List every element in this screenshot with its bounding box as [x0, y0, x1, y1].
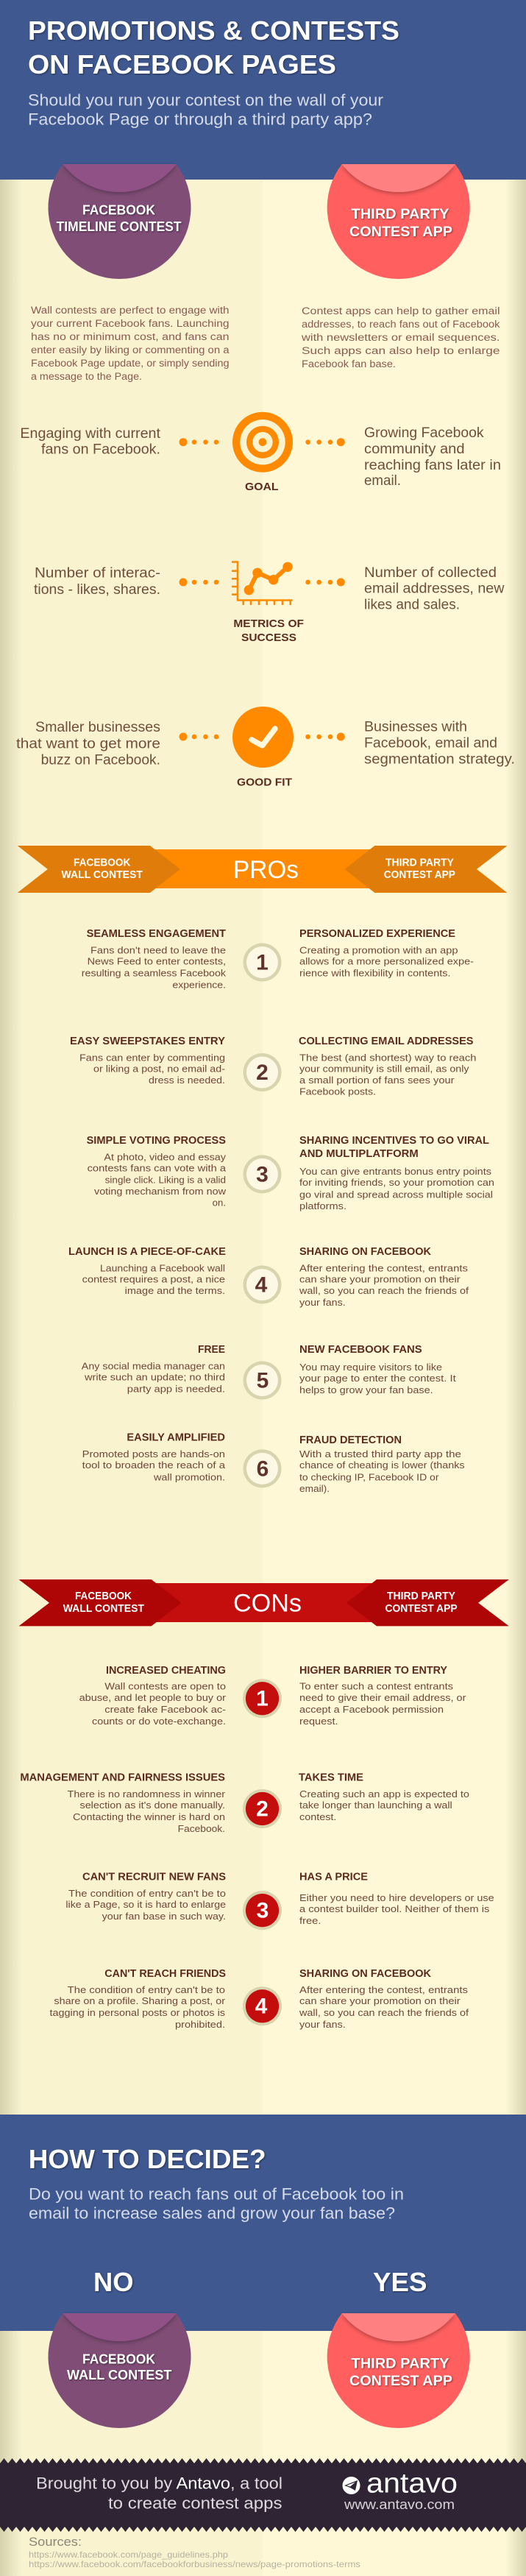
banner: pros: CONTEST APP — [384, 868, 455, 881]
credit text: Brought to you by Antavo, a tool — [36, 2474, 282, 2492]
pro 6 right: fraud detection: FRAUD DETECTION — [299, 1434, 402, 1446]
pro 3 left: simple voting process: voting mechanism from now — [94, 1186, 227, 1197]
label: good fit: GOOD FIT — [237, 776, 292, 789]
pro 4 left: launch is a piece of cake — [68, 1246, 226, 1296]
pro 1 right: personalized experience: allows for a more personalized expe- — [299, 956, 474, 967]
pro 4 left: launch is a piece of cake: image and the terms. — [125, 1285, 225, 1296]
pro 1 left: seamless engagement: experience. — [172, 979, 226, 990]
text block: contest app intro: addresses, to reach fans out of Facebook — [302, 319, 500, 330]
number badge 5: 5 — [257, 1369, 269, 1393]
con 3 left: can't recruit new fans: like a Page, so it is hard to enlarge — [65, 1899, 226, 1910]
row: good fit, right text: Businesses with — [364, 720, 467, 735]
con 4 right: sharing on facebook — [299, 1968, 469, 2030]
badge: Facebook timeline contest: FACEBOOK — [82, 203, 155, 218]
subtitle: Should you run your contest on the wall of your — [28, 91, 383, 109]
pro 3 left: simple voting process: SIMPLE VOTING PROCESS — [87, 1135, 226, 1147]
number badge 3: 3 — [256, 1162, 269, 1186]
row: good fit, left text: buzz on Facebook. — [41, 752, 160, 768]
row: goal, right text — [364, 425, 501, 489]
con 2 right: takes time — [299, 1772, 469, 1822]
title — [28, 15, 399, 79]
con 3 left: can't recruit new fans: CAN'T RECRUIT NEW FANS — [82, 1872, 226, 1883]
pro 3 left: simple voting process — [87, 1135, 227, 1208]
con 1 right: higher barrier to entry: To enter such a contest entrants — [299, 1681, 454, 1692]
number badge 3: 3 — [257, 1899, 269, 1923]
con 4 right: sharing on facebook: can share your promotion on their — [299, 1995, 461, 2006]
number badge 2: 2 — [256, 1061, 269, 1085]
row: goal, right text: email. — [364, 473, 401, 489]
pro 1 left: seamless engagement: News Feed to enter contests, — [88, 956, 226, 967]
pro 3 right: sharing incentives: platforms. — [299, 1200, 346, 1211]
text block: wall contest intro: your current Facebook fans. Launching — [31, 318, 230, 329]
row: good fit, right text — [364, 720, 515, 768]
banner: pros: PROs — [233, 856, 299, 884]
pro 2 right: collecting email addresses: your community is still email, as only — [299, 1063, 469, 1074]
con 2 right: takes time: take longer than launching a wall — [299, 1800, 452, 1811]
pro 1 right: personalized experience — [299, 928, 474, 979]
text block: contest app intro: Facebook fan base. — [302, 358, 396, 369]
text block: wall contest intro: enter easily by liking or commenting on a — [31, 344, 230, 355]
number badge 2 — [243, 1053, 281, 1091]
con 2 left: management and fairness issues: Contacting the winner is hard on — [73, 1811, 225, 1822]
label: no: NO — [93, 2267, 134, 2297]
con 2 right: takes time: contest. — [299, 1811, 336, 1822]
row: good fit, left text: Smaller businesses — [35, 720, 160, 735]
pro 5 right: new facebook fans: You may require visitors to like — [299, 1362, 442, 1373]
badge: Facebook timeline contest: TIMELINE CONTEST — [57, 219, 182, 234]
heading: how to decide: HOW TO DECIDE? — [29, 2144, 266, 2174]
pro 5 left: free: party app is needed. — [127, 1383, 225, 1394]
pro 3 right: sharing incentives — [299, 1135, 494, 1211]
pro 2 right: collecting email addresses: COLLECTING EMAIL ADDRESSES — [299, 1036, 474, 1047]
number badge 1 — [243, 1679, 282, 1718]
con 3 right: has a price: a contest builder tool. Neither of them is — [299, 1903, 490, 1914]
credit text: to create contest apps — [108, 2494, 282, 2513]
number badge 4: 4 — [255, 1995, 268, 2019]
con 4 left: can't reach friends: share on a profile. Sharing a post, or — [54, 1995, 226, 2006]
con 3 right: has a price: Either you need to hire developers or use — [299, 1892, 494, 1903]
dotted connector left — [180, 733, 218, 740]
pro 1 right: personalized experience: Creating a promotion with an app — [299, 944, 458, 955]
con 1 right: higher barrier to entry: accept a Facebook permission — [299, 1704, 444, 1715]
panel: header — [0, 0, 526, 180]
pro 6 right: fraud detection: to checking IP, Facebook ID or — [299, 1471, 439, 1482]
pro 5 left: free: write such an update; no third — [84, 1371, 225, 1382]
text block: wall contest intro: Wall contests are perfect to engage with — [31, 305, 230, 316]
icon: line chart — [232, 562, 293, 605]
pro 1 right: personalized experience: PERSONALIZED EXPERIENCE — [299, 928, 455, 940]
pro 3 left: simple voting process: At photo, video and essay — [104, 1151, 227, 1162]
pro 5 left: free: FREE — [198, 1344, 225, 1356]
row: good fit, left text — [16, 720, 160, 768]
number badge 2 — [243, 1789, 282, 1828]
question text: email to increase sales and grow your fan base? — [29, 2204, 395, 2222]
row: metrics, left text — [34, 566, 160, 598]
badge: third party contest app: THIRD PARTY — [352, 2355, 449, 2371]
dotted connector left — [180, 578, 218, 586]
con 2 left: management and fairness issues — [20, 1772, 226, 1834]
banner: cons: WALL CONTEST — [63, 1602, 144, 1615]
pro 3 right: sharing incentives: go viral and spread across multiple social — [299, 1189, 493, 1200]
row: goal, right text: community and — [364, 442, 465, 457]
pro 2 right: collecting email addresses: a small portion of fans sees your — [299, 1075, 455, 1086]
sources: https://www.facebook.com/page_guidelines.php — [29, 2550, 228, 2560]
dotted connector right — [305, 733, 345, 740]
credit text — [36, 2474, 282, 2513]
text block: contest app intro — [301, 305, 500, 369]
con 4 left: can't reach friends: The condition of entry can't be to — [68, 1984, 225, 1995]
banner: pros — [18, 846, 507, 893]
pro 6 left: easily amplified: tool to broaden the reach of a — [82, 1459, 226, 1471]
sources — [29, 2535, 360, 2569]
pro 1 left: seamless engagement: SEAMLESS ENGAGEMENT — [87, 928, 226, 940]
label: yes: YES — [373, 2267, 427, 2297]
con 1 left: increased cheating: counts or do vote-exchange. — [92, 1716, 226, 1727]
icon: check mark — [232, 707, 294, 768]
pro 3 left: simple voting process: contests fans can vote with a — [88, 1162, 227, 1173]
pro 4 left: launch is a piece of cake: contest requires a post, a nice — [82, 1273, 225, 1285]
badge: Facebook wall contest: FACEBOOK — [82, 2352, 155, 2366]
row: goal, right text: Growing Facebook — [364, 425, 484, 441]
number badge 1 — [243, 944, 281, 982]
con 4 left: can't reach friends — [50, 1968, 226, 2030]
con 1 left: increased cheating: INCREASED CHEATING — [106, 1665, 226, 1677]
row: good fit, right text: Facebook, email and — [364, 736, 497, 751]
pro 3 left: simple voting process: on. — [213, 1197, 226, 1208]
pro 4 right: sharing on facebook: can share your promotion on their — [299, 1273, 461, 1285]
banner: pros: WALL CONTEST — [62, 868, 143, 881]
number badge 1: 1 — [256, 1687, 269, 1711]
banner: cons: CONTEST APP — [385, 1602, 458, 1615]
con 2 left: management and fairness issues: selection as it's done manually. — [79, 1800, 225, 1811]
con 3 right: has a price — [299, 1872, 494, 1926]
row: metrics, right text — [364, 565, 505, 612]
con 4 left: can't reach friends: prohibited. — [175, 2019, 225, 2030]
badge: Facebook timeline contest — [49, 164, 191, 279]
icon: target — [232, 412, 293, 473]
badge: third party contest app: CONTEST APP — [349, 224, 452, 240]
pro 4 right: sharing on facebook: your fans. — [299, 1297, 346, 1308]
question text — [29, 2184, 404, 2222]
banner: pros: THIRD PARTY — [385, 856, 454, 868]
number badge 5 — [243, 1362, 281, 1400]
pro 3 right: sharing incentives: SHARING INCENTIVES TO GO VIRAL — [299, 1135, 489, 1147]
pro 6 right: fraud detection — [299, 1434, 465, 1494]
pro 5 right: new facebook fans — [299, 1344, 456, 1395]
row: goal, left text: Engaging with current — [20, 426, 161, 442]
number badge 6 — [243, 1449, 281, 1487]
pro 1 right: personalized experience: rience with flexibility in contents. — [299, 968, 450, 979]
badge: third party contest app: CONTEST APP — [349, 2373, 452, 2389]
con 2 left: management and fairness issues: MANAGEMENT AND FAIRNESS ISSUES — [20, 1772, 225, 1784]
con 1 right: higher barrier to entry: HIGHER BARRIER TO ENTRY — [299, 1665, 447, 1677]
con 2 left: management and fairness issues: Facebook. — [178, 1823, 225, 1834]
pro 2 left: easy sweepstakes entry — [70, 1036, 225, 1086]
pro 3 right: sharing incentives: You can give entrants bonus entry points — [299, 1166, 492, 1177]
con 1 right: higher barrier to entry — [299, 1665, 466, 1727]
label: metrics of success — [233, 618, 304, 644]
con 3 left: can't recruit new fans: your fan base in such way. — [102, 1911, 226, 1922]
text block: contest app intro: Such apps can also help to enlarge — [302, 345, 500, 356]
label: metrics of success: METRICS OF — [233, 618, 304, 630]
row: goal, left text — [20, 426, 161, 458]
pro 5 right: new facebook fans: helps to grow your fan base. — [299, 1384, 433, 1395]
pro 6 right: fraud detection: With a trusted third party app the — [299, 1448, 461, 1459]
con 2 right: takes time: Creating such an app is expected to — [299, 1788, 469, 1800]
banner: cons — [19, 1579, 509, 1626]
text block: contest app intro: with newsletters or email sequences. — [301, 332, 500, 343]
con 3 right: has a price: free. — [299, 1915, 321, 1926]
text block: wall contest intro: has no or minimum cost, and fans can — [31, 331, 230, 342]
number badge 4 — [243, 1986, 282, 2025]
pro 6 left: easily amplified: wall promotion. — [153, 1471, 225, 1482]
logo: antavo: antavo — [366, 2469, 458, 2499]
pro 4 right: sharing on facebook: SHARING ON FACEBOOK — [299, 1246, 432, 1258]
text block: wall contest intro — [31, 305, 230, 382]
badge: third party contest app — [327, 164, 470, 279]
con 4 left: can't reach friends: tagging in personal posts or photos is — [50, 2007, 226, 2018]
question text: Do you want to reach fans out of Facebook too in — [29, 2184, 404, 2203]
number badge 1: 1 — [256, 951, 269, 974]
con 3 right: has a price: HAS A PRICE — [299, 1872, 368, 1883]
pro 2 right: collecting email addresses: The best (and shortest) way to reach — [299, 1052, 477, 1063]
pro 5 right: new facebook fans: NEW FACEBOOK FANS — [299, 1344, 422, 1356]
badge: Facebook wall contest: WALL CONTEST — [67, 2368, 172, 2382]
dotted connector right — [305, 438, 345, 446]
banner: cons: THIRD PARTY — [387, 1590, 455, 1602]
pro 6 right: fraud detection: chance of cheating is lower (thanks — [299, 1459, 465, 1471]
dotted connector left — [180, 438, 218, 446]
subtitle — [28, 91, 383, 128]
con 4 right: sharing on facebook: SHARING ON FACEBOOK — [299, 1968, 432, 1980]
row: metrics, right text: email addresses, new — [364, 581, 505, 597]
row: good fit, left text: that want to get more — [16, 737, 160, 752]
pro 2 left: easy sweepstakes entry: Fans can enter by commenting — [79, 1052, 225, 1063]
panel: how to decide — [0, 2115, 526, 2331]
con 1 left: increased cheating: Wall contests are open to — [104, 1681, 226, 1692]
con 1 left: increased cheating — [79, 1665, 227, 1727]
row: metrics, left text: Number of interac- — [35, 566, 160, 581]
con 2 left: management and fairness issues: There is no randomness in winner — [68, 1788, 226, 1800]
number badge 4: 4 — [255, 1273, 268, 1297]
con 3 left: can't recruit new fans: The condition of entry can't be to — [68, 1888, 226, 1899]
con 4 right: sharing on facebook: After entering the contest, entrants — [299, 1984, 469, 1995]
number badge 2: 2 — [256, 1797, 269, 1821]
pro 2 right: collecting email addresses — [299, 1036, 477, 1097]
con 1 left: increased cheating: abuse, and let people to buy or — [79, 1692, 227, 1703]
row: goal, left text: fans on Facebook. — [41, 442, 160, 458]
pro 3 right: sharing incentives: for inviting friends, so your promotion can — [299, 1177, 494, 1188]
pro 1 left: seamless engagement: resulting a seamless Facebook — [82, 968, 227, 979]
badge: third party contest app — [327, 2313, 470, 2428]
label: goal: GOAL — [245, 481, 278, 493]
badge: third party contest app: THIRD PARTY — [352, 206, 449, 222]
pro 5 left: free — [82, 1344, 225, 1394]
con 4 right: sharing on facebook: your fans. — [299, 2019, 346, 2030]
badge: Facebook wall contest — [48, 2313, 191, 2428]
pro 6 left: easily amplified: Promoted posts are hands-on — [82, 1448, 225, 1459]
pro 4 left: launch is a piece of cake: LAUNCH IS A PIECE-OF-CAKE — [68, 1246, 226, 1258]
pro 4 right: sharing on facebook: wall, so you can reach the friends of — [299, 1285, 469, 1296]
text block: wall contest intro: a message to the Page. — [31, 371, 142, 382]
pro 6 left: easily amplified: EASILY AMPLIFIED — [127, 1432, 225, 1444]
pro 2 left: easy sweepstakes entry: or liking a post, no email ad- — [93, 1063, 225, 1074]
number badge 3 — [243, 1891, 282, 1930]
text block: contest app intro: Contest apps can help to gather email — [302, 305, 500, 316]
pro 1 left: seamless engagement — [82, 928, 227, 990]
row: goal, right text: reaching fans later in — [364, 458, 501, 473]
logo: antavo: www.antavo.com — [344, 2497, 455, 2512]
pro 3 left: simple voting process: single click. Liking is a valid — [105, 1174, 226, 1185]
number badge 3 — [243, 1155, 281, 1193]
pro 6 left: easily amplified — [82, 1432, 226, 1482]
con 3 left: can't recruit new fans — [65, 1872, 226, 1922]
subtitle: Facebook Page or through a third party app? — [28, 110, 372, 128]
pro 5 left: free: Any social media manager can — [82, 1360, 225, 1371]
pro 5 right: new facebook fans: your page to enter the contest. It — [299, 1373, 456, 1384]
banner: pros: FACEBOOK — [74, 856, 131, 868]
con 2 right: takes time: TAKES TIME — [299, 1772, 363, 1784]
pro 6 right: fraud detection: email). — [299, 1483, 330, 1494]
pro 2 left: easy sweepstakes entry: dress is needed. — [149, 1075, 225, 1086]
title: PROMOTIONS & CONTESTS — [28, 15, 399, 46]
pro 4 right: sharing on facebook — [299, 1246, 469, 1308]
pro 1 left: seamless engagement: Fans don't need to leave the — [90, 944, 226, 955]
con 4 right: sharing on facebook: wall, so you can reach the friends of — [299, 2007, 469, 2018]
con 1 right: higher barrier to entry: need to give their email address, or — [299, 1692, 466, 1703]
sources: Sources: — [29, 2535, 82, 2549]
banner: cons: FACEBOOK — [75, 1590, 132, 1602]
banner: cons: CONs — [233, 1590, 302, 1618]
number badge 4 — [243, 1266, 281, 1304]
pro 2 right: collecting email addresses: Facebook posts. — [299, 1086, 376, 1097]
row: metrics, left text: tions - likes, shares. — [34, 582, 160, 598]
con 4 left: can't reach friends: CAN'T REACH FRIENDS — [104, 1968, 226, 1980]
row: good fit, right text: segmentation strategy. — [364, 752, 515, 768]
text block: wall contest intro: Facebook Page update, or simply sending — [31, 358, 230, 369]
sources: https://www.facebook.com/facebookforbusiness/news/page-promotions-terms — [29, 2559, 360, 2569]
con 1 left: increased cheating: create fake Facebook ac- — [104, 1704, 226, 1715]
title: ON FACEBOOK PAGES — [28, 49, 336, 79]
number badge 6: 6 — [257, 1457, 269, 1481]
pro 2 left: easy sweepstakes entry: EASY SWEEPSTAKES ENTRY — [70, 1036, 225, 1047]
label: metrics of success: SUCCESS — [241, 631, 296, 644]
pro 4 right: sharing on facebook: After entering the contest, entrants — [299, 1263, 469, 1273]
panel: footer credit — [0, 2458, 526, 2532]
dotted connector right — [305, 578, 345, 586]
pro 4 left: launch is a piece of cake: Launching a Facebook wall — [100, 1263, 225, 1273]
con 1 right: higher barrier to entry: request. — [299, 1716, 338, 1727]
pro 3 right: sharing incentives: AND MULTIPLATFORM — [299, 1148, 419, 1160]
logo: antavo — [343, 2469, 458, 2512]
row: metrics, right text: likes and sales. — [364, 598, 460, 612]
row: metrics, right text: Number of collected — [364, 565, 497, 581]
